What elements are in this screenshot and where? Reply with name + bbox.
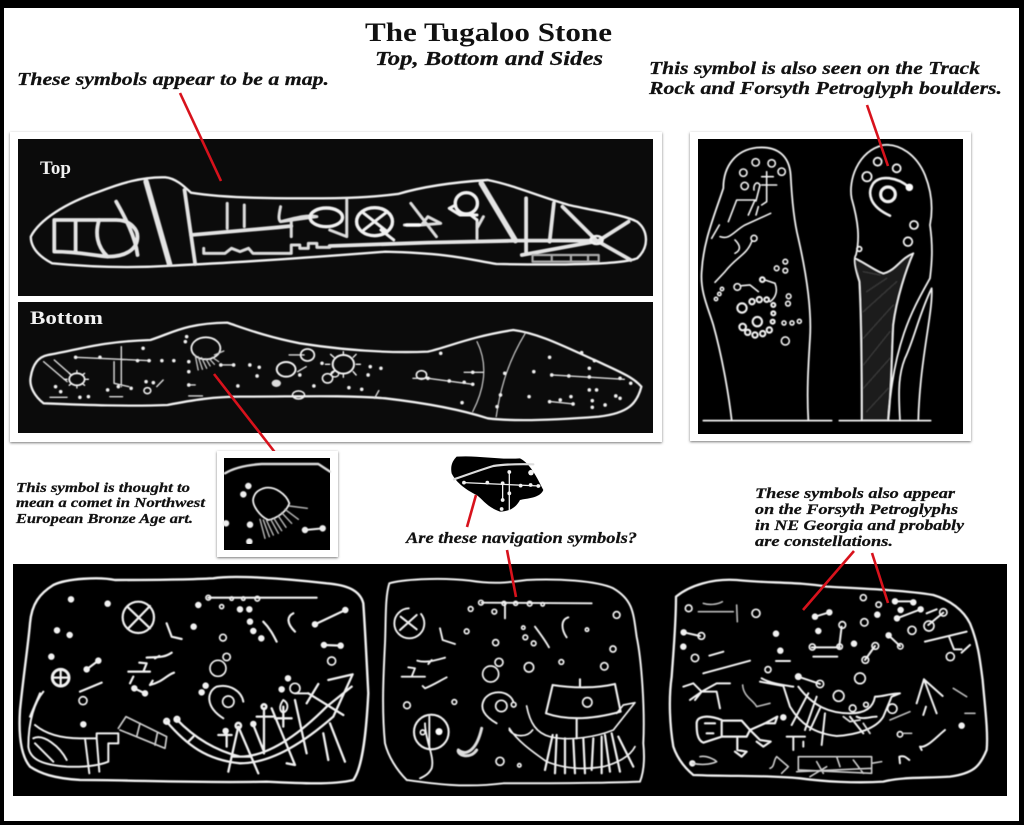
petroglyph panel: right	[670, 580, 987, 782]
red arrow lines	[180, 93, 888, 455]
red line: navigation symbols	[507, 550, 516, 597]
panel: sides of stone	[690, 132, 971, 441]
top stone drawing	[31, 177, 646, 267]
panel: bottom black band	[13, 564, 1007, 796]
side stone drawings	[701, 145, 932, 421]
caption: comet: mean a comet in Northwest	[16, 496, 206, 511]
red lines: constellations	[803, 551, 888, 610]
comet inset	[217, 451, 338, 557]
title: Top, Bottom and Sides	[375, 48, 603, 70]
caption: constellations: These symbols also appear	[755, 486, 955, 502]
navigation symbol fragment	[451, 456, 543, 512]
comet symbol	[225, 464, 330, 542]
caption: comet: European Bronze Age art.	[15, 512, 193, 527]
caption: constellations: on the Forsyth Petroglyphs	[755, 502, 958, 518]
panel: top and bottom of stone	[10, 132, 662, 442]
bottom stone drawing	[30, 323, 641, 420]
petroglyph panel: left	[20, 577, 368, 783]
label: Top: Top	[40, 158, 71, 179]
label: Bottom: Bottom	[30, 308, 103, 329]
caption: constellations	[755, 486, 965, 550]
petroglyph panel: middle	[383, 579, 644, 785]
caption: comet	[15, 481, 206, 527]
title: The Tugaloo Stone	[365, 17, 612, 47]
caption: track rock	[648, 58, 1002, 98]
caption: map: These symbols appear to be a map.	[17, 69, 329, 89]
caption: comet: This symbol is thought to	[16, 481, 190, 496]
caption: constellations: in NE Georgia and probably	[755, 518, 965, 534]
caption: track rock: This symbol is also seen on the Track	[649, 58, 980, 78]
panel: bottom view	[18, 302, 653, 433]
panel: top view	[18, 139, 653, 296]
title	[365, 17, 612, 70]
caption: track rock: Rock and Forsyth Petroglyph boulders.	[648, 78, 1002, 98]
caption: constellations: are constellations.	[755, 534, 893, 550]
red line: navigation fragment	[467, 495, 476, 527]
caption: navigation: Are these navigation symbols?	[405, 530, 637, 547]
